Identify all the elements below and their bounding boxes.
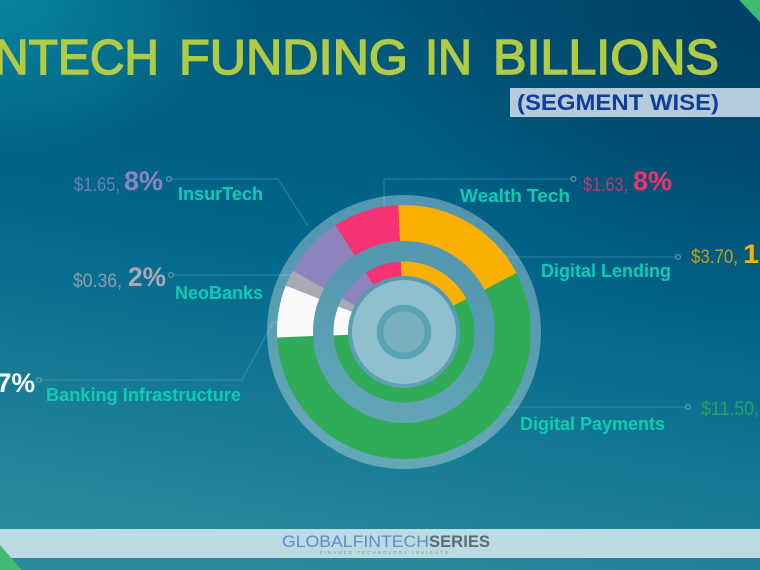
centre disc [352, 280, 456, 384]
value: Wealth Tech [583, 166, 672, 196]
footer logo: FINANCE TECHNOLOGY INSIGHTS [320, 550, 448, 555]
title [0, 31, 719, 85]
value: InsurTech [74, 166, 163, 196]
label: NeoBanks: NeoBanks [175, 283, 263, 303]
outer translucent ring [267, 195, 541, 469]
label: InsurTech: InsurTech [178, 184, 263, 204]
title: FUNDING [179, 31, 408, 85]
leader line: InsurTech [167, 177, 308, 226]
centre ring [380, 308, 428, 356]
value: Digital Lending: $3.70, [691, 247, 738, 268]
subtitle band [510, 88, 760, 117]
title: BILLIONS [493, 31, 719, 85]
value: Wealth Tech: 8% [633, 166, 672, 196]
inner segments [317, 245, 491, 419]
label: Banking Infrastructure: Banking Infrastructure [46, 385, 241, 405]
value: NeoBanks [73, 262, 166, 292]
leader line: Wealth Tech [384, 177, 576, 206]
title: IN [425, 31, 472, 85]
leader line: Digital Payments [505, 405, 690, 409]
label: Digital Lending: Digital Lending [541, 261, 671, 281]
donut chart [254, 182, 554, 482]
value: NeoBanks: 2% [128, 262, 166, 292]
value: InsurTech: 8% [124, 166, 163, 196]
footer band [0, 529, 760, 558]
subtitle band: (SEGMENT WISE) [517, 90, 719, 115]
label: Wealth Tech: Wealth Tech [460, 186, 570, 206]
corner accent: bottom left [0, 545, 22, 570]
outer segments [254, 182, 554, 482]
leader line: Banking Infrastructure [37, 322, 282, 382]
value: InsurTech: $1.65, [74, 175, 120, 196]
leader line: NeoBanks [169, 273, 292, 277]
footer logo: SERIES [429, 532, 490, 551]
value: Digital Lending [691, 239, 760, 269]
value: NeoBanks: $0.36, [73, 271, 122, 292]
value: Wealth Tech: $1.63, [583, 175, 628, 196]
label: Digital Payments: Digital Payments [520, 414, 665, 434]
leader line: Digital Lending [508, 255, 680, 259]
corner accent: top right [739, 0, 760, 22]
footer logo: GLOBALFINTECH [282, 532, 429, 551]
footer logo [282, 532, 490, 555]
